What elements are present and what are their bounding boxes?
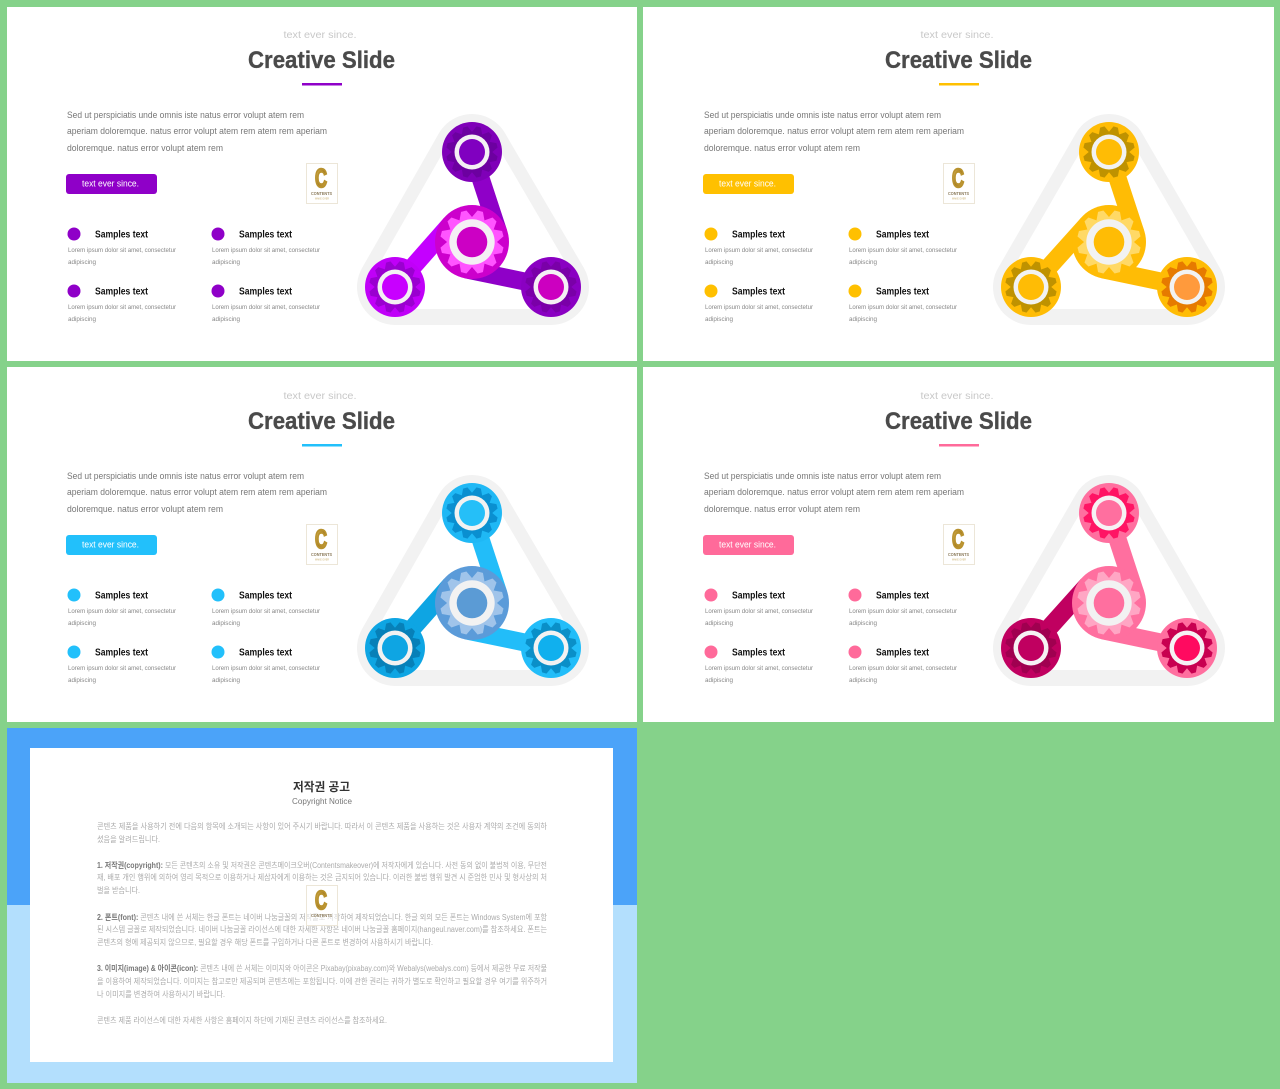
gear triangle diagram	[999, 120, 1219, 319]
logo	[944, 524, 974, 564]
logo: MAKE OVER	[315, 558, 330, 562]
list item 1	[704, 588, 813, 627]
list item 1: Lorem ipsum dolor sit amet, consectetur	[68, 608, 176, 615]
logo: MAKE OVER	[952, 196, 967, 200]
list item 3: Lorem ipsum dolor sit amet, consectetur	[68, 665, 176, 672]
notice section 2: 콘텐츠의 형에 제공되지 않으므로, 필요할 경우 해당 폰트를 구입하거나 다른 폰트로 변경하여 사용하시기 바랍니다.	[97, 937, 433, 947]
logo: MAKE OVER	[952, 558, 967, 562]
heading underline	[302, 83, 342, 86]
list item 3: Samples text	[95, 648, 149, 658]
intro text	[67, 471, 327, 515]
list item 2: Lorem ipsum dolor sit amet, consectetur	[849, 247, 957, 254]
notice section 3	[97, 963, 547, 999]
list item 2	[848, 228, 957, 266]
list item 1: Samples text	[95, 590, 149, 602]
list item 2: Samples text	[876, 230, 930, 240]
list item 2: adipiscing	[212, 259, 241, 266]
gear triangle diagram	[363, 120, 583, 319]
intro text: doloremque. natus error volupt atem rem	[67, 143, 223, 154]
panel: copyright notice	[7, 728, 637, 1083]
list item 3	[68, 284, 176, 323]
list item 1: adipiscing	[68, 259, 97, 266]
logo	[944, 163, 974, 204]
heading underline	[302, 444, 342, 446]
list item 4	[848, 284, 957, 323]
intro text: aperiam doloremque. natus error volupt atem rem atem rem aperiam	[704, 126, 964, 137]
notice section 3: 3. 이미지(image) & 아이콘(icon): 콘텐츠 내에 쓴 서체는 이미지와 아이콘은 Pixabay(pixabay.com)와 Webalys(webalys.com) 등에서 제공한 무료 저작물	[97, 963, 547, 973]
list item 2: adipiscing	[849, 620, 878, 627]
intro text: aperiam doloremque. natus error volupt atem rem atem rem aperiam	[67, 126, 327, 137]
heading underline	[939, 83, 979, 86]
kicker: text ever since.	[284, 29, 356, 41]
notice section 2: 2. 폰트(font): 콘텐츠 내에 쓴 서체는 한글 폰트는 네이버 나눔글꼴의 저작물로 저작하여 제작되었습니다. 한글 외의 모든 폰트는 Windows System에 포함	[97, 912, 548, 922]
heading: Creative Slide	[885, 47, 1032, 74]
button: text ever since.	[719, 540, 776, 550]
list item 1: Lorem ipsum dolor sit amet, consectetur	[705, 247, 813, 254]
notice section 2: 된 시스템 글꼴로 제작되었습니다. 네이버 나눔글꼴 라이선스에 대한 자세한 사항은 네이버 나눔글꼴 홈페이지(hangeul.naver.com)를 참조하세요. 폰트는	[97, 924, 547, 934]
list item 4: Samples text	[876, 286, 930, 298]
notice section 3: 을 이용하여 제작되었습니다. 이미지는 참고로만 제공되며 콘텐츠에는 포함됩니다. 이에 관한 권리는 귀하가 별도로 확인하고 필요할 경우 여기를 위주하거	[97, 976, 547, 986]
list item 3: adipiscing	[68, 316, 97, 323]
list item 4	[212, 646, 320, 684]
intro text: aperiam doloremque. natus error volupt atem rem atem rem aperiam	[67, 487, 327, 498]
notice section 1: 벌을 받습니다.	[97, 885, 140, 895]
intro text	[704, 110, 964, 154]
list item 4: adipiscing	[212, 316, 241, 323]
list item 1: adipiscing	[705, 620, 734, 627]
kicker: text ever since.	[920, 29, 994, 41]
list item 2	[212, 228, 320, 266]
logo: C	[952, 524, 964, 554]
list item 1: adipiscing	[705, 259, 734, 266]
logo: CONTENTS	[311, 191, 332, 196]
intro text: doloremque. natus error volupt atem rem	[67, 504, 223, 515]
list item 2: adipiscing	[849, 259, 878, 266]
panel: blue slide	[7, 367, 637, 722]
list item 4: Lorem ipsum dolor sit amet, consectetur	[212, 304, 320, 311]
list item 4: Lorem ipsum dolor sit amet, consectetur	[212, 665, 320, 672]
notice subheading: Copyright Notice	[292, 796, 352, 806]
intro text: aperiam doloremque. natus error volupt atem rem atem rem aperiam	[704, 487, 964, 498]
list item 3	[704, 284, 813, 323]
notice section 1: 재, 배포 개인 행위에 의하여 영리 목적으로 이용하거나 제삼자에게 이용하는 것은 금지되어 있습니다. 이러한 불법 행위 발견 시 준엄한 민사 및 형사상의 처	[97, 872, 547, 882]
notice intro	[97, 821, 548, 844]
logo: CONTENTS	[948, 191, 969, 196]
logo	[306, 524, 338, 564]
list item 4: Samples text	[239, 648, 293, 658]
intro text: doloremque. natus error volupt atem rem	[704, 504, 860, 515]
heading: Creative Slide	[248, 408, 395, 435]
list item 1: adipiscing	[68, 620, 97, 627]
list item 3	[68, 646, 176, 684]
notice section 1: 1. 저작권(copyright): 모든 콘텐츠의 소유 및 저작권은 콘텐츠메이크오버(Contentsmakeover)에 저작자에게 있습니다. 사전 동의 없이 불법적 이용, 무단전	[97, 860, 547, 870]
list item 1	[68, 228, 176, 266]
list item 3: Samples text	[732, 286, 786, 298]
logo: C	[315, 163, 327, 193]
list item 1: Lorem ipsum dolor sit amet, consectetur	[705, 608, 813, 615]
logo: CONTENTS	[311, 552, 332, 557]
list item 3: Lorem ipsum dolor sit amet, consectetur	[68, 304, 176, 311]
notice intro: 셨음을 알려드립니다.	[97, 834, 160, 844]
logo: C	[952, 163, 964, 193]
list item 3: adipiscing	[68, 677, 97, 684]
list item 2: Samples text	[876, 590, 930, 602]
logo watermark	[306, 885, 338, 926]
button	[703, 174, 794, 194]
notice footer: 콘텐츠 제품 라이선스에 대한 자세한 사항은 홈페이지 하단에 기재된 콘텐츠 라이선스를 참조하세요.	[97, 1015, 387, 1025]
list item 3: Samples text	[95, 286, 149, 298]
notice section 1	[97, 860, 547, 895]
panel: yellow slide	[643, 7, 1274, 361]
gear triangle diagram	[363, 481, 583, 680]
list item 3: Samples text	[732, 648, 786, 658]
logo: C	[315, 524, 327, 554]
button	[66, 174, 157, 194]
list item 2	[212, 588, 320, 627]
list item 2: adipiscing	[212, 620, 241, 627]
notice section 2	[97, 912, 548, 947]
kicker: text ever since.	[284, 390, 356, 402]
list item 2	[848, 588, 957, 627]
logo: CONTENTS	[948, 552, 969, 557]
heading: Creative Slide	[885, 408, 1032, 435]
list item 3: adipiscing	[705, 677, 734, 684]
intro text	[704, 471, 964, 515]
list item 2: Lorem ipsum dolor sit amet, consectetur	[212, 608, 320, 615]
logo watermark: C	[315, 885, 327, 915]
list item 2: Samples text	[239, 230, 293, 240]
list item 4	[212, 284, 320, 323]
logo: MAKE OVER	[315, 196, 330, 200]
button: text ever since.	[719, 178, 776, 188]
notice heading: 저작권 공고	[293, 779, 350, 794]
list item 1	[68, 588, 176, 627]
button	[66, 535, 157, 555]
intro text: Sed ut perspiciatis unde omnis iste natus error volupt atem rem	[704, 471, 941, 482]
list item 4: Lorem ipsum dolor sit amet, consectetur	[849, 304, 957, 311]
panel: purple slide	[7, 7, 637, 361]
panel: pink slide	[643, 367, 1274, 722]
list item 3: Lorem ipsum dolor sit amet, consectetur	[705, 304, 813, 311]
list item 1	[704, 228, 813, 266]
intro text: doloremque. natus error volupt atem rem	[704, 143, 860, 154]
list item 4: Samples text	[239, 286, 293, 298]
intro text: Sed ut perspiciatis unde omnis iste natus error volupt atem rem	[67, 471, 304, 482]
list item 2: Lorem ipsum dolor sit amet, consectetur	[212, 247, 320, 254]
gear triangle diagram	[999, 481, 1219, 680]
list item 4: adipiscing	[849, 316, 878, 323]
button	[703, 535, 794, 555]
list item 4: Lorem ipsum dolor sit amet, consectetur	[849, 665, 957, 672]
logo watermark: CONTENTS	[311, 913, 332, 918]
notice intro: 콘텐츠 제품을 사용하기 전에 다음의 항목에 소개되는 사항이 있어 주시기 바랍니다. 따라서 이 콘텐츠 제품을 사용하는 것은 사용자 계약의 조건에 동의하	[97, 821, 548, 831]
list item 1: Samples text	[732, 590, 786, 602]
list item 4: adipiscing	[212, 677, 241, 684]
list item 4: adipiscing	[849, 677, 878, 684]
list item 3	[704, 646, 813, 684]
logo	[306, 163, 338, 204]
heading underline	[939, 444, 979, 446]
button: text ever since.	[82, 178, 139, 188]
list item 1: Lorem ipsum dolor sit amet, consectetur	[68, 247, 176, 254]
intro text	[67, 110, 327, 154]
notice section 3: 나 이미지를 변경하여 사용하시기 바랍니다.	[97, 989, 225, 999]
list item 2: Samples text	[239, 590, 293, 602]
list item 4	[848, 646, 957, 684]
heading: Creative Slide	[248, 47, 395, 74]
list item 4: Samples text	[876, 648, 930, 658]
list item 3: Lorem ipsum dolor sit amet, consectetur	[705, 665, 813, 672]
list item 1: Samples text	[95, 230, 149, 240]
list item 1: Samples text	[732, 230, 786, 240]
intro text: Sed ut perspiciatis unde omnis iste natus error volupt atem rem	[67, 110, 304, 121]
list item 2: Lorem ipsum dolor sit amet, consectetur	[849, 608, 957, 615]
kicker: text ever since.	[920, 390, 994, 402]
list item 3: adipiscing	[705, 316, 734, 323]
intro text: Sed ut perspiciatis unde omnis iste natus error volupt atem rem	[704, 110, 941, 121]
button: text ever since.	[82, 540, 139, 550]
